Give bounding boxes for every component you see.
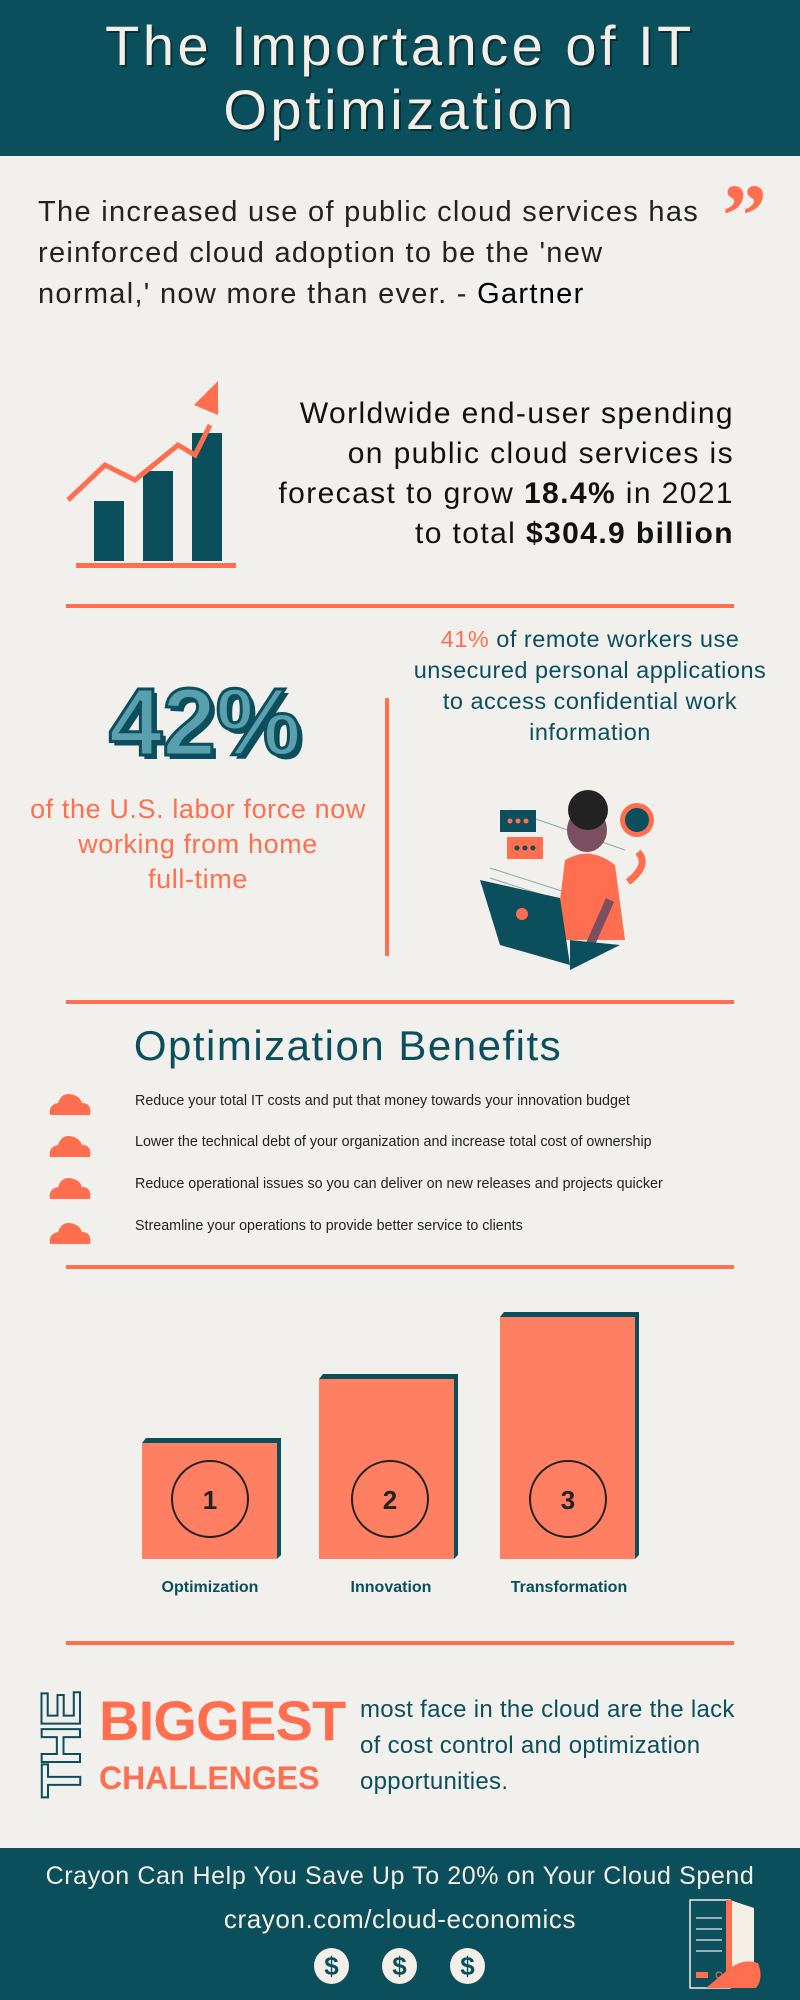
quote text (38, 196, 699, 310)
title (105, 14, 695, 142)
text: remote workers: 41% of remote workers use (441, 626, 739, 652)
benefit 3: Reduce operational issues so you can deliver on new releases and projects quicker (135, 1176, 663, 1192)
label: optimization: Optimization (162, 1579, 258, 1596)
icon: cloud (50, 1178, 90, 1199)
CHALLENGES: CHALLENGES (99, 1760, 319, 1796)
spending stat: forecast to grow 18.4% in 2021 (278, 477, 734, 510)
step bar chart: 1 (203, 1485, 217, 1515)
text: labor force: of the U.S. labor force now (30, 794, 366, 824)
icons: dollar coins: $ (460, 1951, 475, 1981)
quote text: normal,' now more than ever. - Gartner (38, 278, 585, 310)
title: The Importance of IT (105, 14, 695, 77)
icon: cloud (50, 1136, 90, 1157)
icon: cloud (50, 1223, 90, 1244)
spending stat (278, 397, 734, 550)
text: remote workers: information (529, 719, 651, 745)
footer url: crayon.com/cloud-economics (224, 1904, 576, 1934)
footer tagline: Crayon Can Help You Save Up To 20% on Your Cloud Spend (46, 1862, 754, 1890)
challenges text: opportunities. (360, 1768, 508, 1795)
spending stat: on public cloud services is (348, 437, 734, 470)
icons: dollar coins: $ (324, 1951, 339, 1981)
footer (0, 1848, 800, 2000)
benefits list (50, 1093, 663, 1244)
icon: cloud (50, 1094, 90, 1115)
vertical divider (385, 698, 389, 956)
icon: server tower (689, 1899, 761, 1989)
icons: dollar coins: $ (392, 1951, 407, 1981)
challenges text: most face in the cloud are the lack (360, 1696, 735, 1723)
benefit 2: Lower the technical debt of your organization and increase total cost of ownership (135, 1134, 652, 1150)
icons: dollar coins (314, 1948, 485, 1984)
spending stat: to total $304.9 billion (415, 517, 734, 550)
text: labor force (30, 794, 366, 894)
header banner (0, 0, 800, 156)
illustration: remote worker (480, 790, 654, 970)
step bar chart: 3 (561, 1485, 575, 1515)
icon: quote mark: ” (722, 167, 767, 266)
text: remote workers: unsecured personal applications (414, 657, 766, 683)
stat: 42%: 42% (109, 669, 301, 776)
quote text: The increased use of public cloud services has (38, 196, 699, 228)
text: labor force: full-time (148, 864, 248, 894)
benefit 1: Reduce your total IT costs and put that money towards your innovation budget (135, 1093, 630, 1109)
text: remote workers: to access confidential work (443, 688, 737, 714)
step bar chart (142, 1312, 639, 1559)
challenges text (360, 1696, 735, 1795)
title: Optimization (223, 78, 577, 141)
heading: optimization benefits: Optimization Benefits (134, 1022, 562, 1069)
icon: growth bar chart (66, 381, 236, 568)
challenges text: of cost control and optimization (360, 1732, 700, 1759)
text: remote workers (414, 626, 766, 745)
benefit 4: Streamline your operations to provide better service to clients (135, 1218, 523, 1234)
spending stat: Worldwide end-user spending (300, 397, 734, 430)
text: labor force: working from home (78, 829, 318, 859)
quote text: reinforced cloud adoption to be the 'new (38, 237, 603, 269)
label: innovation: Innovation (351, 1579, 431, 1596)
step bar chart: 2 (383, 1485, 397, 1515)
label: transformation: Transformation (511, 1579, 627, 1596)
BIGGEST: BIGGEST (99, 1689, 345, 1752)
